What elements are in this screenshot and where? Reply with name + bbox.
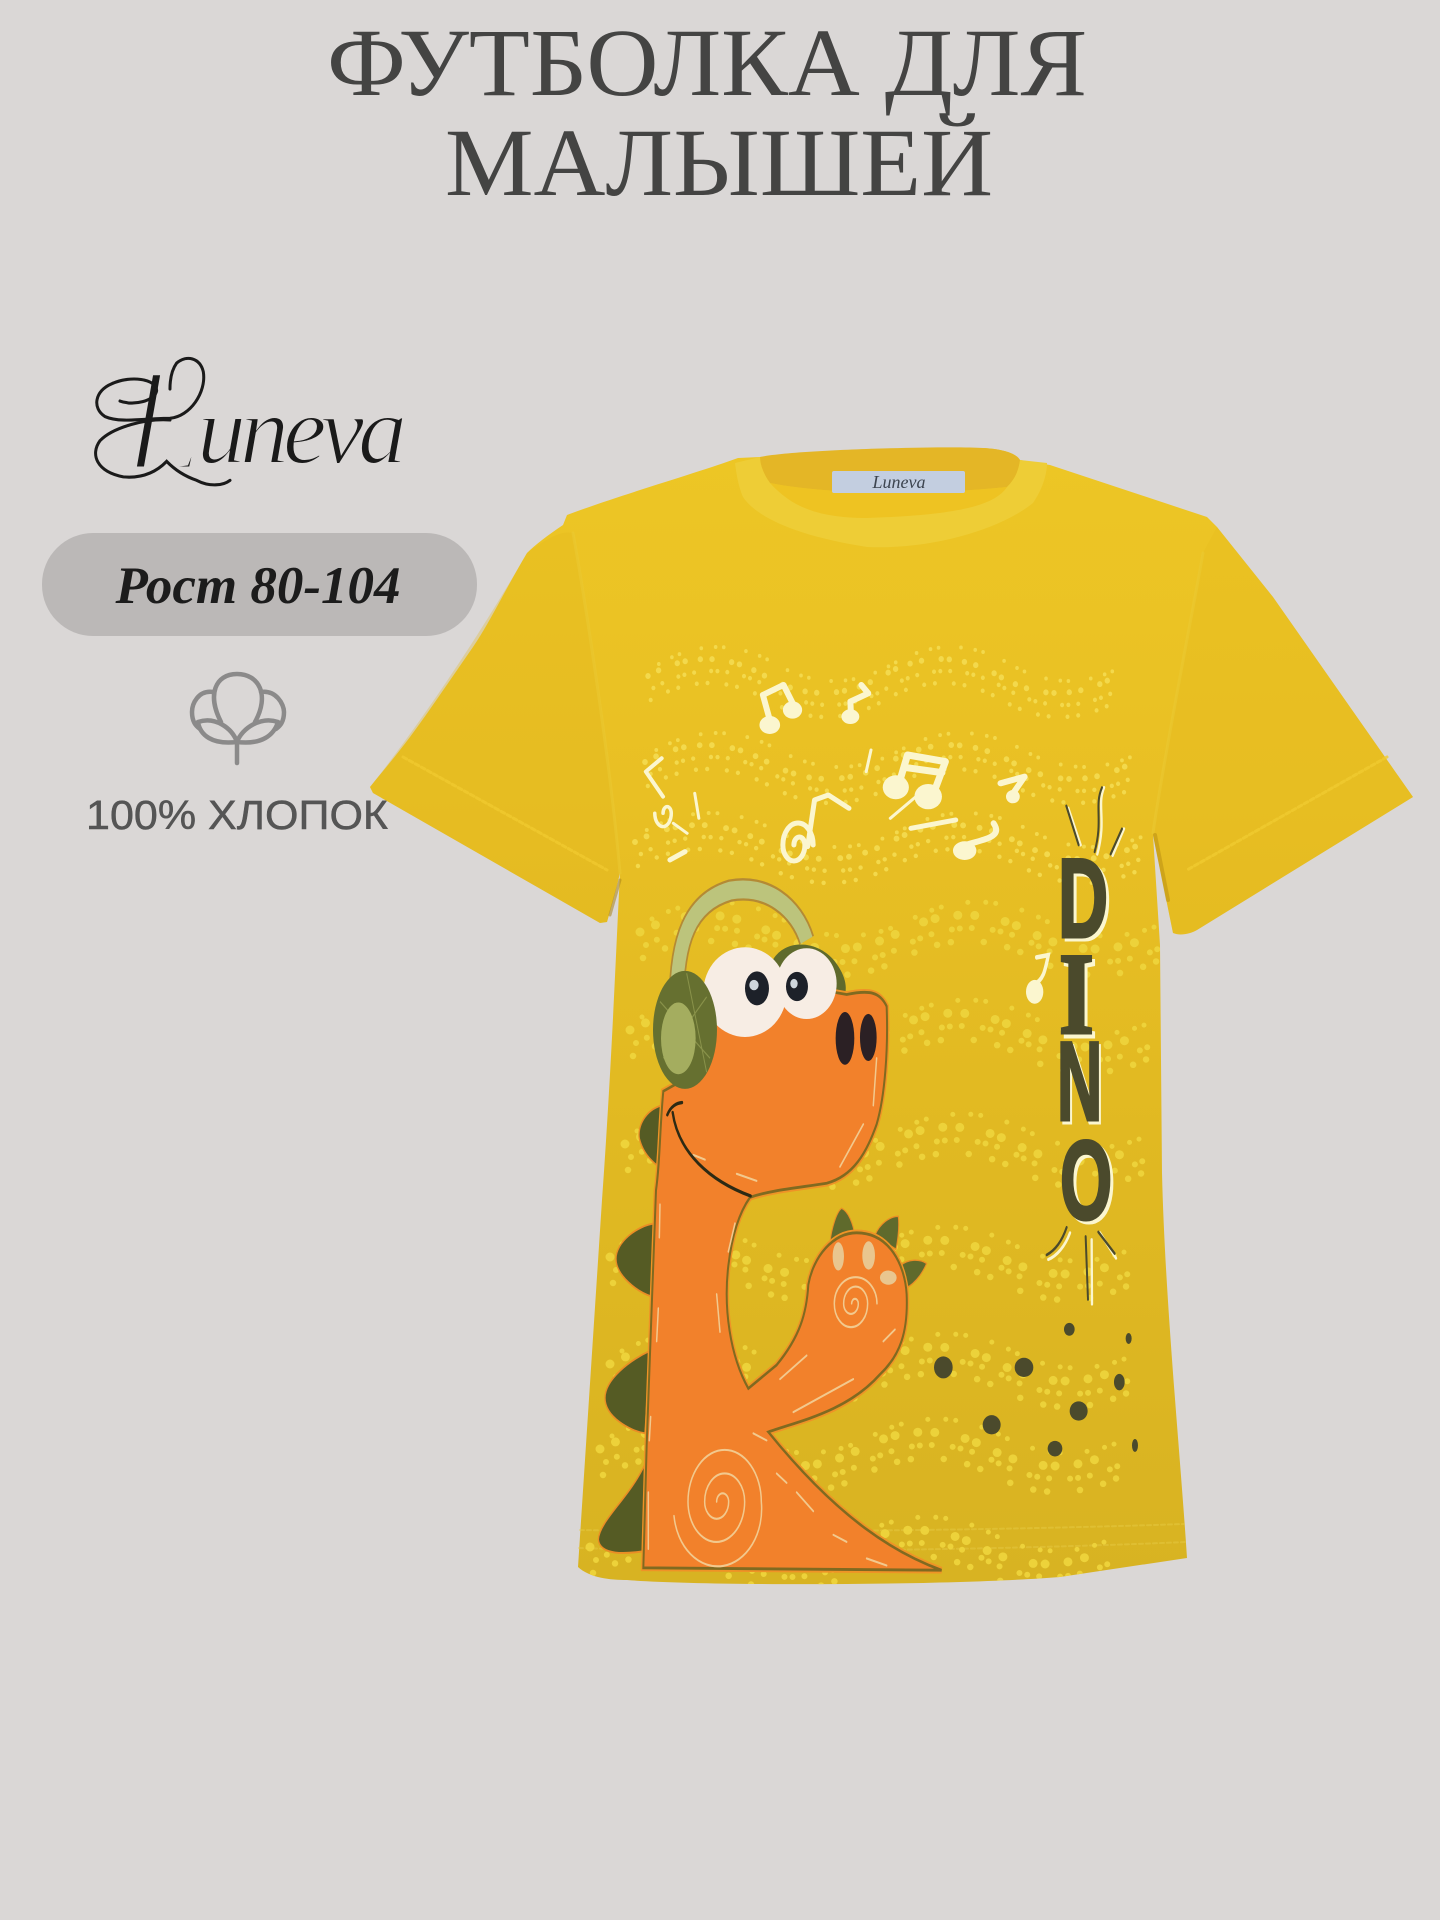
toe pads	[833, 1241, 897, 1285]
paw claws	[830, 1208, 927, 1287]
neck label	[832, 471, 965, 493]
brand logo: Luneva: L	[120, 337, 205, 503]
DINO lettering: D	[1061, 839, 1111, 964]
music notes	[646, 685, 1025, 861]
DINO lettering: I	[1059, 930, 1094, 1059]
dinosaur appliqué	[598, 889, 942, 1570]
back spikes	[598, 1105, 662, 1553]
DINO lettering: D	[1058, 836, 1108, 961]
brand logo: Luneva	[96, 337, 404, 503]
height pill	[42, 533, 477, 636]
headphones	[653, 889, 807, 1089]
back collar rib	[760, 447, 1020, 493]
DINO lettering: O	[1063, 1120, 1115, 1246]
DINO rays, small note and print dots	[934, 788, 1138, 1456]
icon: cotton boll	[192, 674, 284, 763]
neck opening	[770, 483, 1007, 518]
DINO lettering: O	[1060, 1117, 1112, 1243]
front collar rib	[735, 457, 1047, 547]
head crest	[773, 945, 846, 999]
title: ФУТБОЛКА ДЛЯ	[327, 9, 1087, 116]
DINO lettering	[1057, 836, 1115, 1246]
body	[643, 983, 942, 1570]
DINO lettering: N	[1057, 1020, 1102, 1145]
smile	[667, 1103, 751, 1196]
shirt body and sleeves	[370, 448, 1413, 1584]
belly spiral and paw stitching	[648, 1058, 895, 1566]
DINO lettering: I	[1062, 934, 1097, 1063]
nostrils	[836, 1012, 854, 1065]
DINO lettering: N	[1059, 1023, 1104, 1148]
brand logo: Luneva: uneva	[197, 377, 404, 485]
sleeve seams and hems	[403, 533, 1387, 1550]
eyes	[703, 947, 837, 1037]
title: МАЛЫШЕЙ	[445, 109, 993, 216]
sleeve shading	[370, 527, 1413, 933]
t-shirt	[370, 447, 1413, 1590]
neck label: Luneva	[872, 472, 926, 492]
dotted wave pattern	[590, 647, 1172, 1590]
label: 100% cotton: 100% ХЛОПОК	[86, 792, 388, 838]
title	[327, 9, 1087, 216]
height pill: Рост 80-104	[114, 557, 401, 615]
infographic canvas	[42, 31, 1413, 1584]
body halo	[643, 983, 942, 1570]
